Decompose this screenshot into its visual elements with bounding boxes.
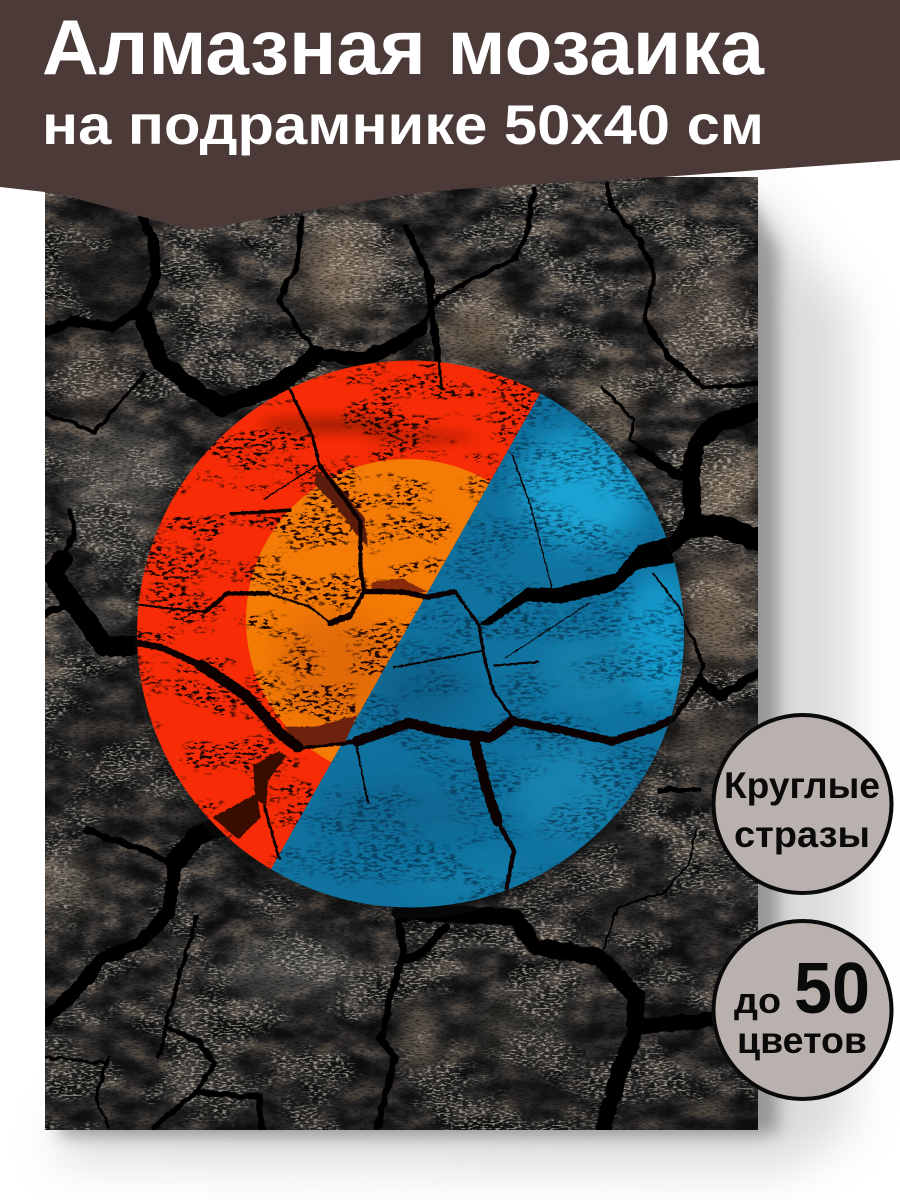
rock texture bbox=[40, 177, 758, 1130]
canvas drop shadow bbox=[60, 190, 850, 1170]
subtitle: на подрамнике 50х40 см bbox=[42, 93, 764, 156]
title: Алмазная мозаика bbox=[42, 3, 765, 91]
badge: up to 50 colours bbox=[714, 921, 892, 1099]
badge: up to 50 colours: до bbox=[734, 980, 781, 1021]
disc cracks bbox=[120, 358, 700, 888]
canvas artwork: cracked rock with disc bbox=[40, 177, 800, 1130]
disc bbox=[137, 360, 684, 908]
red half with orange circle bbox=[137, 360, 540, 870]
badge: up to 50 colours: цветов bbox=[737, 1020, 867, 1061]
badge: round rhinestones bbox=[714, 715, 892, 893]
badge: up to 50 colours: 50 bbox=[794, 949, 870, 1029]
badge: round rhinestones: Круглые bbox=[724, 765, 880, 806]
disc shadow bbox=[134, 365, 688, 919]
blue half bbox=[271, 393, 684, 908]
header banner bbox=[0, 0, 900, 230]
badge: round rhinestones: стразы bbox=[734, 814, 870, 855]
rock cracks bbox=[45, 184, 758, 1127]
orange inner circle bbox=[246, 459, 490, 762]
